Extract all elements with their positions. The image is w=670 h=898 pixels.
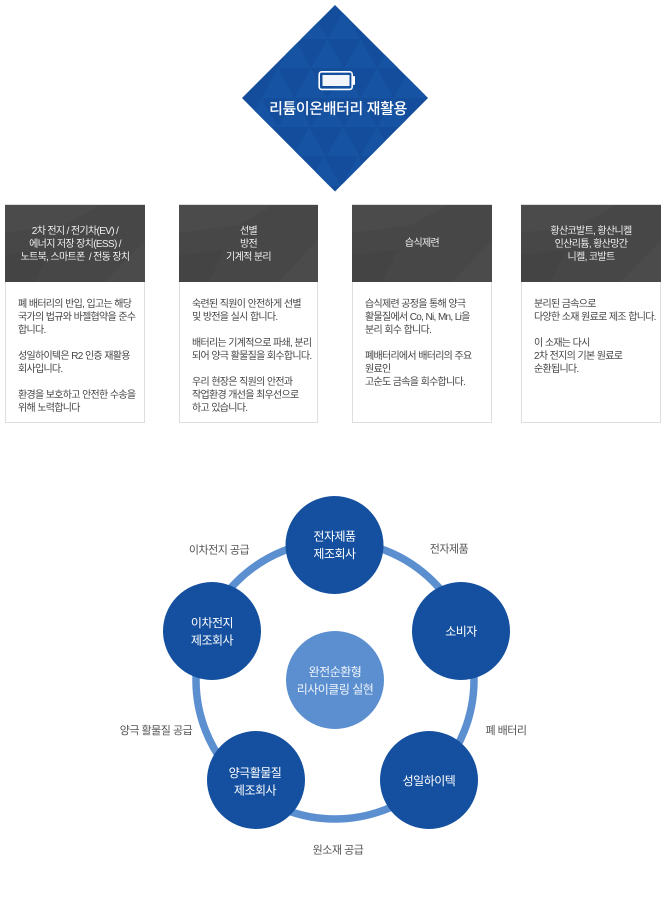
node: cathode material makers <box>207 731 305 829</box>
card 2 text: 및 방전을 실시 합니다. <box>192 312 277 322</box>
flow label: cathode material supply: 양극 활물질 공급 <box>120 723 193 737</box>
node: battery makers: 제조회사 <box>191 634 234 648</box>
center node: 완전순환형 <box>309 665 361 679</box>
card 2 header: 선별 <box>240 226 257 237</box>
card 1 header: 2차 전지 / 전기차(EV) / <box>32 226 118 237</box>
card 1 text <box>18 298 136 414</box>
card 1 header: 노트북, 스마트폰 / 전동 장치 <box>21 252 129 263</box>
card 3 text: 습식제련 공정을 통해 양극 <box>365 298 465 310</box>
node: consumers: 소비자 <box>445 624 477 638</box>
card 3 text <box>365 298 472 388</box>
center node <box>286 631 384 729</box>
card 2 text: 하고 있습니다. <box>192 402 247 414</box>
cycle ring <box>196 541 474 819</box>
panel: card 1 collection <box>5 204 145 423</box>
card 3 header: 습식제련 <box>405 238 439 249</box>
card 4 text: 이 소재는 다시 <box>534 338 590 348</box>
flow label: raw material supply: 원소재 공급 <box>313 844 364 856</box>
card 1 text: 위해 노력합니다 <box>18 402 80 414</box>
card 2 text: 배터리는 기계적으로 파쇄, 분리 <box>192 338 311 348</box>
card 1 text: 환경을 보호하고 안전한 수송을 <box>18 390 135 400</box>
card 3 text: 폐배터리에서 배터리의 주요 <box>365 350 471 362</box>
card 4 text: 다양한 소재 원료로 제조 합니다. <box>534 312 656 322</box>
node: cathode material makers: 제조회사 <box>234 784 277 798</box>
card 4 header <box>521 205 661 282</box>
diamond title: 리튬이온배터리 재활용 <box>269 100 407 118</box>
node: electronics makers: 전자제품 <box>313 530 356 544</box>
icon: battery <box>319 72 355 89</box>
node: Sungeel HiTech: 성일하이텍 <box>403 774 455 788</box>
node: electronics makers <box>286 496 384 594</box>
flow label: electronics: 전자제품 <box>430 542 469 556</box>
card 4 header: 니켈, 코발트 <box>567 252 614 263</box>
card 2 text: 숙련된 직원이 안전하게 선별 <box>192 298 301 310</box>
node: cathode material makers: 양극활물질 <box>229 766 281 780</box>
card 3 text: 분리 회수 합니다. <box>365 324 431 336</box>
flow label: waste battery: 폐 배터리 <box>485 724 527 737</box>
card 1 text: 회사입니다. <box>18 364 62 374</box>
card 4 header: 황산코발트, 황산니켈 <box>550 226 632 237</box>
card 1 text: 국가의 법규와 바젤협약을 준수 <box>18 312 135 322</box>
card 3 text: 고순도 금속을 회수합니다. <box>365 376 465 388</box>
card 2 header: 방전 <box>240 239 257 250</box>
panel: card 4 materials <box>521 204 661 423</box>
card 2 header: 기계적 분리 <box>226 252 271 263</box>
card 4 text <box>534 298 656 374</box>
node: battery makers: 이차전지 <box>191 616 233 630</box>
card 4 text: 2차 전지의 기본 원료로 <box>534 350 622 362</box>
center node: 리사이클링 실현 <box>297 682 373 696</box>
card 4 text: 순환됩니다. <box>534 364 578 374</box>
card 2 text: 작업환경 개선을 최우선으로 <box>192 390 298 400</box>
node: battery makers <box>163 582 261 680</box>
card 2 header <box>179 205 318 282</box>
card 3 text: 원료인 <box>365 364 390 374</box>
diamond badge: lithium-ion battery recycling <box>242 5 428 192</box>
card 2 text: 되어 양극 활물질을 회수합니다. <box>192 350 311 362</box>
node: electronics makers: 제조회사 <box>313 547 356 561</box>
card 4 text: 분리된 금속으로 <box>534 298 596 310</box>
node: consumers <box>412 582 510 680</box>
flow label: battery supply: 이차전지 공급 <box>189 544 250 556</box>
card 2 text <box>192 298 312 414</box>
card 3 header <box>352 205 492 282</box>
panel: card 3 hydrometallurgy <box>352 204 492 423</box>
panel: card 2 sorting <box>179 204 318 423</box>
card 2 text: 우리 현장은 직원의 안전과 <box>192 376 292 388</box>
card 1 text: 합니다. <box>18 324 46 336</box>
card 1 text: 폐 배터리의 반입, 입고는 해당 <box>18 298 131 310</box>
card 1 text: 성일하이텍은 R2 인증 재활용 <box>18 350 130 362</box>
card 4 header: 인산리튬, 황산망간 <box>555 239 627 250</box>
card 1 header <box>5 205 145 282</box>
node: Sungeel HiTech <box>380 731 478 829</box>
card 1 header: 에너지 저장 장치(ESS) / <box>29 239 121 250</box>
card 3 text: 활물질에서 Co, Ni, Mn, Li을 <box>365 312 470 322</box>
